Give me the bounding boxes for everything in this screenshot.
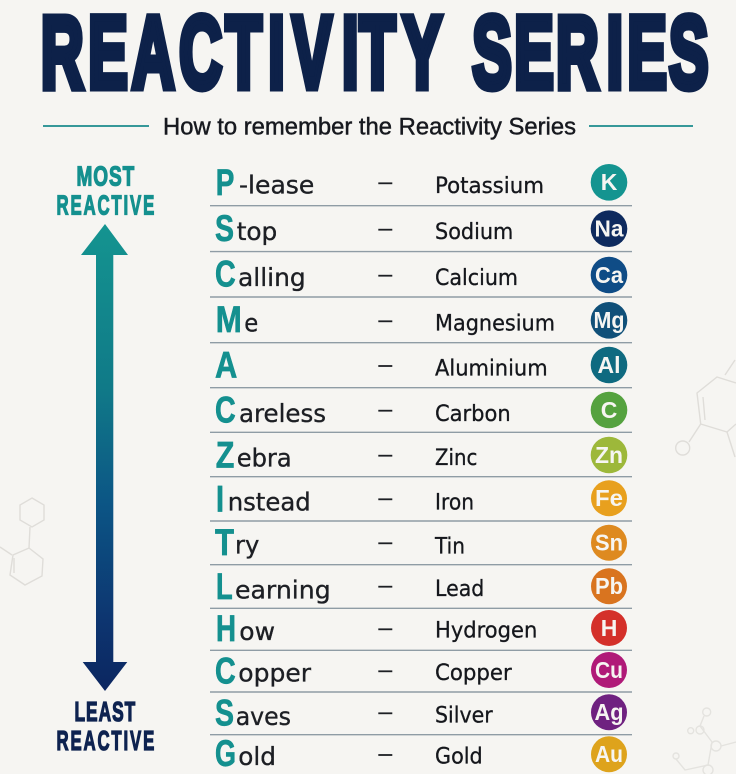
row: Sodium	[210, 208, 632, 252]
row: Sodium: Na	[594, 216, 624, 242]
row: Magnesium: Magnesium	[435, 312, 555, 337]
double-headed reactivity arrow	[81, 224, 128, 691]
row: Copper: opper	[238, 659, 312, 688]
row: Copper: Copper	[435, 661, 513, 686]
row: Lead	[210, 566, 632, 608]
row: Calcium: Ca	[595, 262, 623, 288]
label: most reactive: MOST	[76, 161, 135, 193]
row: Hydrogen: Hydrogen	[435, 619, 537, 644]
row: Copper	[210, 650, 632, 692]
row: Copper: Cu	[595, 657, 623, 683]
row: Iron: Iron	[435, 490, 474, 515]
row: Calcium: alling	[238, 263, 306, 292]
row: Iron: Fe	[595, 485, 623, 511]
row: Carbon: areless	[239, 399, 326, 428]
row: Aluminium	[210, 344, 632, 388]
row: Tin: Sn	[595, 530, 623, 556]
row: Iron	[210, 479, 632, 521]
row: Copper: C	[215, 650, 236, 691]
row: Zinc: ebra	[237, 444, 292, 473]
row: Silver: S	[215, 693, 234, 734]
row: Tin: ry	[235, 530, 259, 559]
row: Lead: Pb	[595, 573, 623, 599]
row: Gold: Gold	[435, 744, 483, 769]
row: Lead: Lead	[435, 577, 484, 602]
row: Silver: aves	[236, 702, 291, 731]
row: Zinc: Zn	[595, 442, 623, 468]
label: most reactive: REACTIVE	[56, 189, 154, 221]
row: Silver: Ag	[594, 699, 624, 725]
row: Hydrogen: H	[216, 608, 236, 649]
row: Sodium: top	[237, 217, 277, 246]
row: Gold: Au	[595, 741, 623, 767]
row: Potassium: -lease	[239, 170, 314, 199]
background molecule: bottom right	[673, 708, 736, 774]
row: Calcium: Calcium	[435, 266, 518, 291]
row: Hydrogen	[210, 608, 632, 650]
row: Aluminium: Al	[598, 352, 620, 378]
row: Lead: L	[216, 566, 233, 607]
row: Potassium: Potassium	[435, 174, 544, 199]
row: Silver: Silver	[435, 703, 494, 728]
row: Gold	[215, 733, 627, 774]
row: Magnesium: e	[244, 309, 258, 338]
row: Silver	[210, 693, 632, 735]
row: Sodium: Sodium	[435, 220, 513, 245]
row: Iron: nstead	[228, 488, 311, 517]
row: Zinc	[210, 434, 632, 477]
label: least reactive: REACTIVE	[56, 725, 154, 756]
row: Gold: old	[238, 742, 276, 771]
background molecule: right	[676, 360, 736, 457]
background molecule: left	[0, 498, 44, 585]
row: Carbon: C	[601, 397, 617, 423]
row: Tin: Tin	[434, 534, 465, 559]
row: Tin	[210, 522, 632, 565]
row: Iron: I	[216, 479, 224, 520]
row: Magnesium: M	[216, 299, 242, 340]
row: Gold: G	[215, 733, 236, 774]
row: Potassium: K	[601, 169, 618, 195]
row: Hydrogen: H	[601, 615, 617, 641]
subtitle with rules: How to remember the Reactivity Series	[163, 114, 576, 140]
row: Potassium	[210, 162, 632, 206]
row: Zinc: Zinc	[435, 446, 477, 471]
row: Hydrogen: ow	[239, 617, 275, 646]
row: Sodium: S	[215, 208, 234, 249]
row: Tin: T	[215, 522, 234, 563]
row: Magnesium	[210, 299, 632, 343]
row: Potassium: P	[216, 162, 234, 203]
row: Aluminium: A	[215, 344, 237, 385]
row: Carbon: Carbon	[435, 402, 511, 427]
row: Calcium	[210, 254, 632, 297]
row: Zinc: Z	[216, 434, 234, 475]
label: least reactive	[56, 696, 154, 756]
row: Carbon	[210, 390, 632, 432]
row: Lead: earning	[235, 575, 331, 604]
row: Carbon: C	[215, 390, 236, 431]
row: Calcium: C	[215, 254, 236, 295]
row: Magnesium: Mg	[594, 307, 624, 333]
row: Aluminium: Aluminium	[435, 357, 548, 382]
label: most reactive	[56, 161, 154, 221]
label: least reactive: LEAST	[74, 696, 135, 727]
